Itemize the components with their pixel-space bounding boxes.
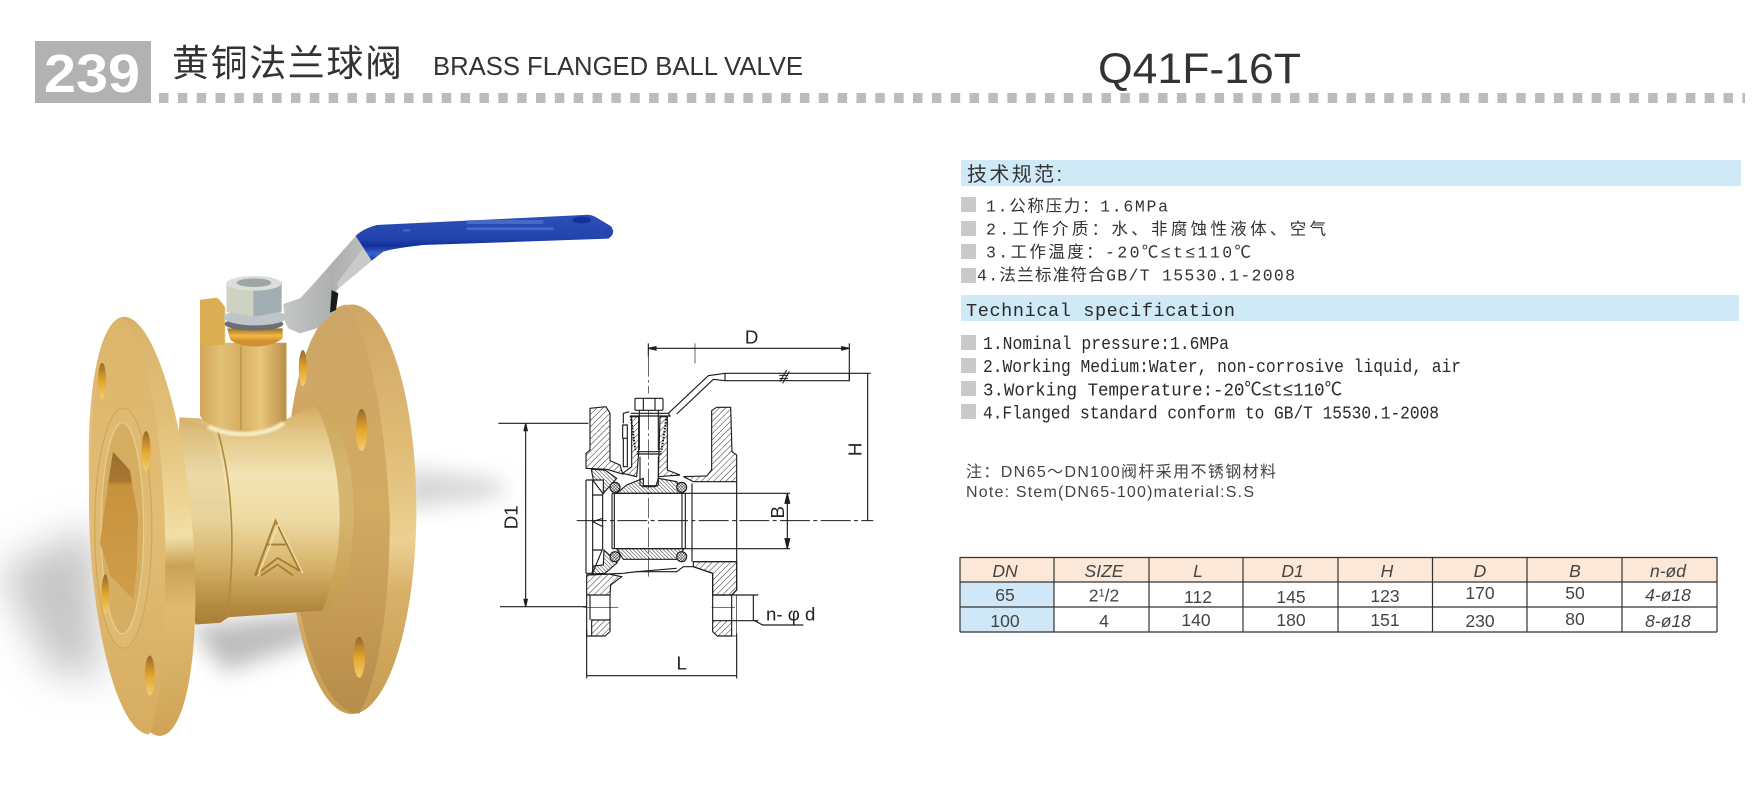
row DN 65: 1 — [1098, 588, 1105, 600]
row DN 100: 151 — [1370, 610, 1400, 630]
dimension D: D — [745, 326, 758, 347]
row DN 65: 65 — [995, 585, 1015, 605]
handle outline — [668, 370, 849, 414]
table header row: n-ød — [1650, 561, 1687, 581]
row DN 65: 2 — [1089, 586, 1098, 606]
dimension B: B — [767, 506, 788, 519]
row DN 65: 112 — [1184, 587, 1212, 607]
dimension n-phi-d — [732, 595, 815, 625]
dimension L: L — [676, 652, 687, 673]
back flange — [287, 305, 416, 714]
table header row: SIZE — [1085, 561, 1124, 581]
section band — [961, 295, 1739, 322]
spec line 3: 3.工作温度：-20℃≤t≤110℃ — [986, 242, 1251, 262]
row DN 100: 4 — [1099, 611, 1109, 631]
body outlines — [586, 480, 737, 636]
row DN 100 — [990, 609, 1691, 631]
row DN 100: 100 — [990, 611, 1020, 631]
row DN 100: 80 — [1565, 609, 1585, 629]
section band — [961, 160, 1741, 186]
hexagonal bore — [100, 452, 138, 600]
valve casting — [73, 298, 416, 739]
dotted divider — [159, 93, 1745, 103]
technical drawing: cross-section with dimensions — [498, 326, 873, 678]
dimension H — [845, 373, 871, 521]
handle, nut and stop assembly — [200, 215, 613, 346]
dimension n-phi-d: n- φ d — [766, 604, 815, 625]
model number: Q41F-16T — [1098, 45, 1301, 93]
stem and nut — [623, 398, 670, 487]
front flange — [73, 313, 211, 739]
dimension D1: D1 — [501, 505, 522, 529]
spec line 2: 2.Working Medium:Water, non-corrosive liquid, air — [983, 357, 1461, 378]
valve stem neck — [200, 298, 287, 434]
table header row: B — [1569, 561, 1581, 581]
row DN 65: 123 — [1370, 586, 1400, 606]
section band: Technical specification — [966, 301, 1235, 322]
section band: 技术规范: — [967, 163, 1062, 186]
row DN 65: 4-ø18 — [1645, 585, 1691, 605]
spec line 1: 1.公称压力：1.6MPa — [986, 196, 1168, 216]
row DN 100: 140 — [1181, 610, 1211, 630]
dimension L — [587, 630, 737, 678]
table header row — [960, 557, 1717, 582]
table header row: L — [1193, 561, 1203, 581]
floor shadows — [0, 468, 505, 680]
DN column shading — [960, 582, 1054, 632]
emblem on body — [255, 521, 303, 576]
spec line 1: 1.Nominal pressure:1.6MPa — [983, 334, 1229, 355]
dimension table — [960, 557, 1717, 632]
note text — [966, 463, 1276, 501]
lever arm — [283, 236, 372, 333]
dimension D — [648, 326, 849, 381]
row DN 100: 180 — [1276, 610, 1306, 630]
stem nut and washers — [224, 276, 287, 331]
spec line 4: 4.Flanged standard conform to GB/T 15530.1-2008 — [983, 404, 1439, 424]
blue handle grip — [356, 215, 613, 261]
row DN 65: 170 — [1465, 583, 1495, 603]
table header row: DN — [992, 561, 1018, 581]
stop block top — [200, 298, 224, 345]
table header row: D1 — [1281, 561, 1304, 581]
row DN 65: /2 — [1105, 586, 1119, 606]
panel: chinese technical specification — [961, 160, 1741, 286]
table header row: H — [1381, 561, 1394, 581]
row DN 65: 50 — [1565, 583, 1585, 603]
row DN 65 — [995, 583, 1691, 607]
dimension D1 — [498, 423, 588, 607]
note text: 注：DN65～DN100阀杆采用不锈钢材料 — [966, 463, 1276, 481]
spec line 4: 4.法兰标准符合GB/T 15530.1-2008 — [977, 266, 1295, 286]
panel: english technical specification — [961, 295, 1739, 424]
english title: BRASS FLANGED BALL VALVE — [433, 51, 803, 81]
valve body cylinder — [178, 346, 353, 625]
product photo: brass flanged ball valve — [0, 215, 613, 739]
number badge 239: 239 — [44, 44, 140, 104]
row DN 100: 230 — [1465, 611, 1495, 631]
spec line 3: 3.Working Temperature:-20℃≤t≤110℃ — [983, 380, 1342, 402]
spec line 2: 2.工作介质：水、非腐蚀性液体、空气 — [986, 220, 1326, 240]
bolt holes — [98, 363, 155, 695]
dimension H: H — [845, 443, 866, 456]
center lines — [648, 343, 695, 577]
note text: Note: Stem(DN65-100)material:S.S — [966, 484, 1254, 501]
row DN 100: 8-ø18 — [1645, 611, 1691, 631]
table grid — [960, 557, 1717, 632]
row DN 65: 145 — [1276, 587, 1306, 607]
page header — [35, 41, 1745, 104]
chinese title: 黄铜法兰球阀 — [172, 43, 402, 84]
dimension B — [693, 493, 790, 549]
table header row: D — [1474, 561, 1487, 581]
section hatching — [586, 407, 737, 636]
brass packing ring — [227, 328, 283, 346]
